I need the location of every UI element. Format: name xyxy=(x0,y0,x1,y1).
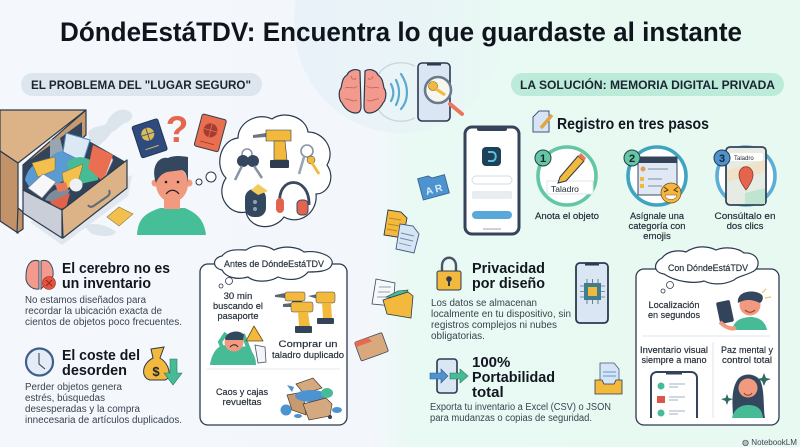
step 2: assign category: categoría con xyxy=(628,221,686,232)
icon: money bag with falling arrow: $ xyxy=(152,364,160,379)
heading: three-step registration xyxy=(533,111,709,133)
icon: phone with magnifier xyxy=(418,63,462,121)
panel: with DóndeEstáTDV xyxy=(636,247,779,425)
text: visual inventory: siempre a mano xyxy=(642,355,706,366)
step 2: assign category: emojis xyxy=(643,231,671,242)
panel: total portability: total xyxy=(472,384,504,401)
panel: the cost of disorder: Perder objetos genera xyxy=(25,382,122,393)
text: peace of mind: control total xyxy=(722,355,772,366)
label cloud: with xyxy=(656,247,758,284)
panel: total portability: Exporta tu inventario a Excel (CSV) o JSON xyxy=(430,402,611,413)
title: DóndeEstáTDV: Encuentra lo que guardaste al instante xyxy=(60,17,742,47)
icon: car keys xyxy=(235,149,262,180)
illustration: brain with signal to phone xyxy=(339,63,462,121)
panel: the cost of disorder: desorden xyxy=(62,362,127,379)
icon: blue folder xyxy=(418,172,449,200)
text: visual inventory xyxy=(640,345,708,366)
icon: remote fob xyxy=(245,184,268,217)
icon: document tray xyxy=(595,363,622,394)
icon: house keys xyxy=(299,145,319,174)
text: duplicate drill: taladro duplicado xyxy=(272,350,344,361)
icon: map pin xyxy=(739,167,753,190)
text: peace of mind xyxy=(721,345,773,366)
panel: total portability: 100% xyxy=(472,354,510,371)
panel: privacy by design: registros complejos ni nubes xyxy=(431,320,557,331)
panel: brain is not an inventory xyxy=(25,260,182,328)
panel: brain is not an inventory: recordar la ubicación exacta de xyxy=(25,306,162,317)
text: chaos xyxy=(216,387,268,408)
icon: inventory phone xyxy=(651,372,697,418)
icon: blue passport xyxy=(132,118,168,158)
panel: privacy by design: Los datos se almacenan xyxy=(431,298,537,309)
text: visual inventory: Inventario visual xyxy=(640,345,708,356)
heading: three-step registration: Registro en tres pasos xyxy=(557,116,709,133)
panel: the cost of disorder: estrés, búsquedas xyxy=(25,393,105,404)
heading: solution pill: LA SOLUCIÓN: MEMORIA DIGITAL PRIVADA xyxy=(520,77,775,92)
illustration: app login phone xyxy=(465,127,519,234)
icon: pencil xyxy=(558,153,586,183)
panel: privacy by design: localmente en tu dispositivo, sin xyxy=(431,309,571,320)
panel: privacy by design: obligatorias. xyxy=(431,331,485,342)
text: chaos: Caos y cajas xyxy=(216,387,268,398)
icon: headphones xyxy=(276,182,309,215)
illustration: messy drawer xyxy=(0,110,133,245)
icon: laughing emoji xyxy=(661,183,681,203)
panel: privacy by design xyxy=(431,258,608,342)
step 1: note the object xyxy=(535,147,599,222)
icon: signal waves xyxy=(391,74,407,109)
text: searching passport: pasaporte xyxy=(218,311,258,322)
icon: brain xyxy=(339,70,386,113)
text: location in seconds xyxy=(648,300,700,321)
icon: padlock xyxy=(437,258,461,290)
icon: three drills xyxy=(275,292,335,333)
panel: brain is not an inventory: No estamos diseñados para xyxy=(25,295,146,306)
panel: total portability: para mudanzas o copias de seguridad. xyxy=(430,413,592,424)
label cloud: before: Antes de DóndeEstáTDV xyxy=(224,259,325,270)
icon: pencil on paper xyxy=(533,111,552,132)
text: chaos: revueltas xyxy=(223,397,262,408)
heading: problem pill xyxy=(21,73,262,96)
text: location in seconds: Localización xyxy=(648,300,700,311)
icon: blue folder: A R xyxy=(425,183,444,198)
text: duplicate drill: Comprar un xyxy=(278,339,338,350)
illustration: stressed person xyxy=(210,332,256,365)
icon: phone with chip xyxy=(576,263,608,323)
text: searching passport: buscando el xyxy=(213,301,263,312)
icon: question mark: ? xyxy=(166,109,188,150)
icon: red passport xyxy=(194,114,227,152)
text: searching passport: 30 min xyxy=(224,291,252,302)
panel: the cost of disorder xyxy=(25,347,182,426)
icon: drill xyxy=(253,130,291,168)
panel: privacy by design: por diseño xyxy=(472,275,545,292)
step 3: look up in two clicks xyxy=(714,147,776,232)
illustration: worried man xyxy=(137,156,206,235)
heading: problem pill: EL PROBLEMA DEL "LUGAR SEGURO" xyxy=(31,78,251,92)
icon: clock xyxy=(26,348,53,376)
text: peace of mind: Paz mental y xyxy=(721,345,773,356)
label cloud: with: Con DóndeEstáTDV xyxy=(668,263,749,274)
text: searching passport xyxy=(213,291,263,322)
illustration: calm woman xyxy=(721,373,771,418)
icon: messy boxes xyxy=(280,378,342,420)
icon: warning triangle xyxy=(246,326,263,341)
badge: number 2: 2 xyxy=(629,153,635,165)
badge: number 3: 3 xyxy=(719,153,725,165)
text: location in seconds: en segundos xyxy=(648,310,700,321)
icon: floating yellow and blue documents xyxy=(384,210,419,253)
icon: phone with arrows xyxy=(430,359,468,393)
panel: brain is not an inventory: El cerebro no es xyxy=(62,260,170,277)
thought cloud: lost objects xyxy=(196,115,331,227)
logo: NotebookLM: ◍ NotebookLM xyxy=(742,438,797,447)
panel: brain is not an inventory: un inventario xyxy=(62,275,151,292)
step 2: assign category: Asígnale una xyxy=(630,211,685,222)
illustration: happy man with phone xyxy=(716,289,771,330)
panel: the cost of disorder: desesperadas y la compra xyxy=(25,404,140,415)
icon: receipt and stuffed folder xyxy=(372,279,413,318)
panel: total portability: Portabilidad xyxy=(472,369,555,386)
panel: brain is not an inventory: cientos de objetos poco frecuentes. xyxy=(25,317,182,328)
panel: before DóndeEstáTDV xyxy=(200,246,347,425)
panel: the cost of disorder: El coste del xyxy=(62,347,140,364)
icon: money bag with falling arrow xyxy=(144,347,182,385)
icon: brain with cross xyxy=(26,260,56,290)
badge: number 1: 1 xyxy=(540,153,546,165)
panel: total portability xyxy=(430,354,622,424)
icon: scattered papers xyxy=(255,345,266,363)
step 3: look up in two clicks: Consúltalo en xyxy=(714,211,776,222)
step 3: look up in two clicks: dos clics xyxy=(727,221,764,232)
label cloud: before xyxy=(214,246,332,281)
step 1: note the object: Taladro xyxy=(551,184,579,194)
text: duplicate drill xyxy=(272,339,344,361)
icon: red folder xyxy=(354,332,389,361)
heading: solution pill xyxy=(511,73,784,96)
step 2: assign category xyxy=(624,147,686,242)
step 3: look up in two clicks: Taladro xyxy=(734,156,754,162)
panel: privacy by design: Privacidad xyxy=(472,260,545,277)
step 1: note the object: Anota el objeto xyxy=(535,211,599,222)
panel: the cost of disorder: innecesaria de artículos duplicados. xyxy=(25,415,182,426)
